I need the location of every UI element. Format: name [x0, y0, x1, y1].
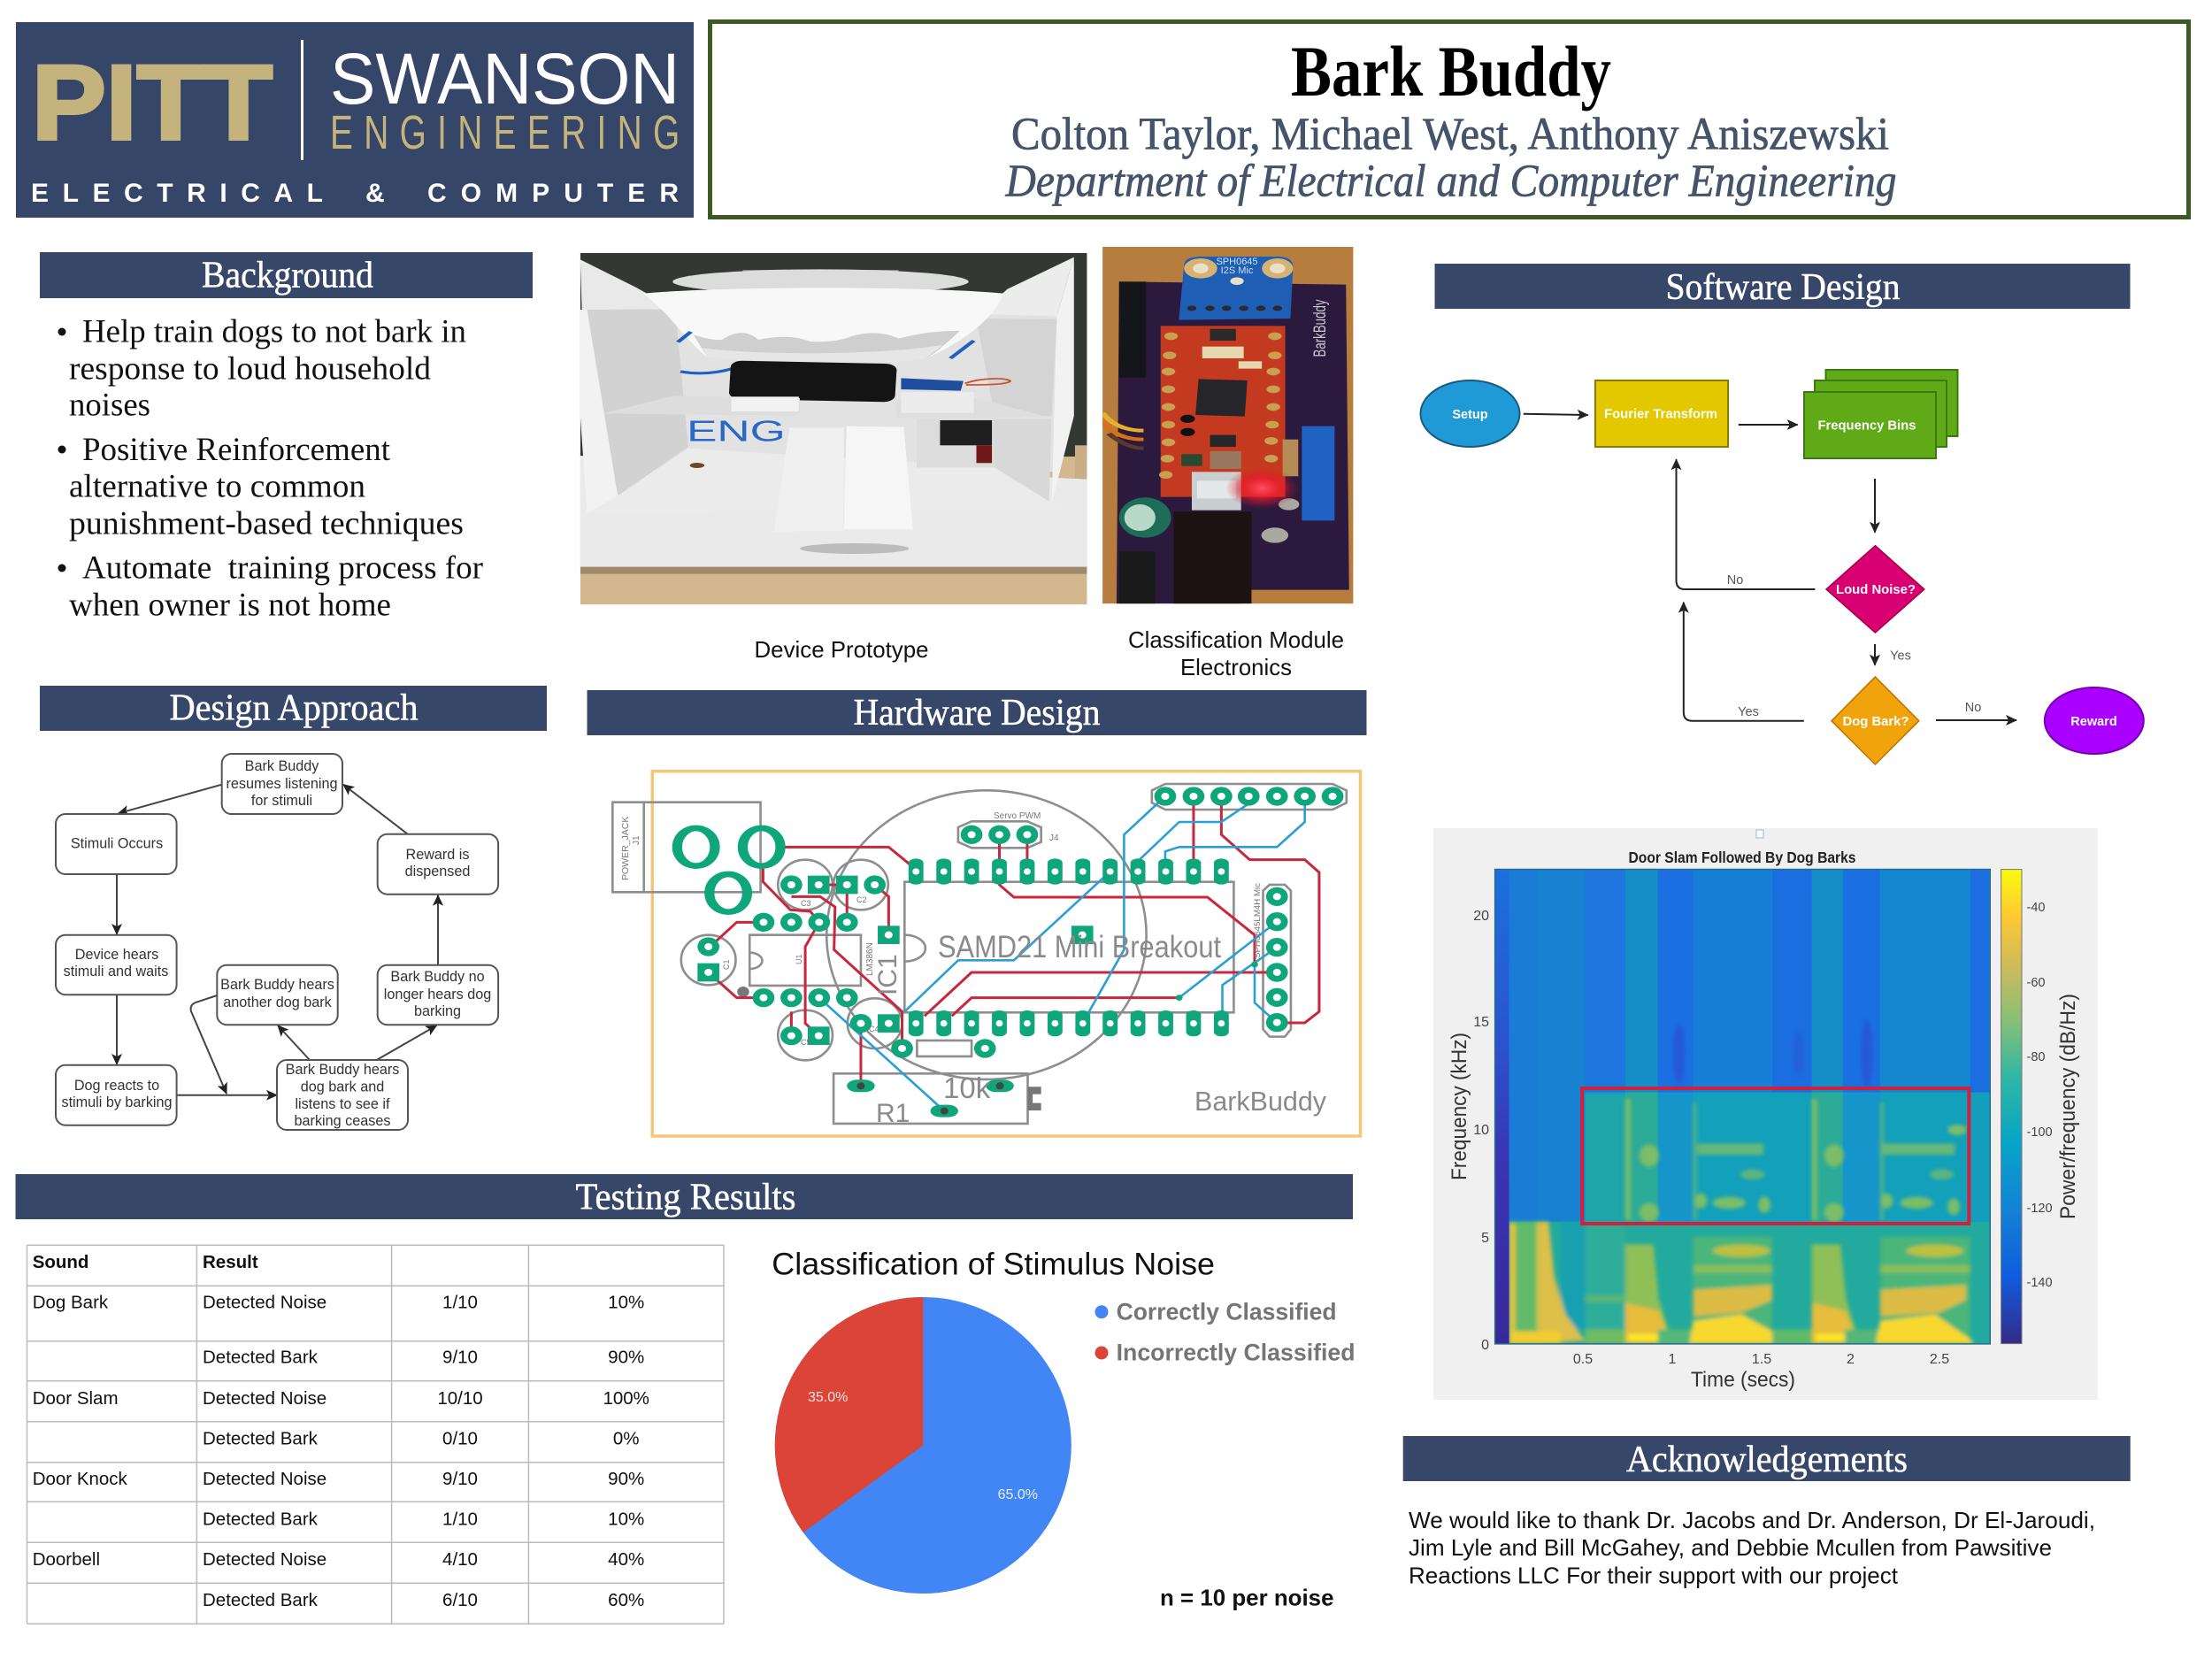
- PCB labels: IC1: [873, 954, 902, 995]
- box: resumes listening: [222, 754, 342, 814]
- pie chart: [775, 1297, 1071, 1594]
- heading: software design: Software Design: [1665, 267, 1901, 308]
- results table: 10%: [608, 1509, 644, 1530]
- caption: classification module electronics: Classification Module: [1128, 626, 1344, 653]
- panel: testing results: [16, 1174, 1356, 1624]
- photo: classification module electronics: SPH0645: [1216, 257, 1258, 267]
- node: reward: [2045, 687, 2144, 754]
- PCB labels: [620, 811, 1326, 1128]
- PCB labels: LM386N: [865, 942, 875, 976]
- results table: 6/10: [442, 1590, 478, 1610]
- pie chart: 65.0%: [998, 1487, 1038, 1502]
- heading: software design: [1435, 264, 2131, 309]
- chart legend: Incorrectly Classified: [1117, 1339, 1356, 1365]
- box: dog reacts: stimuli by barking: [61, 1094, 173, 1110]
- box: hears another bark: Bark Buddy hears: [220, 977, 334, 993]
- edge labels: Yes: [1738, 705, 1759, 719]
- x axis: 1: [1669, 1352, 1677, 1367]
- chart title: Classification of Stimulus Noise: [772, 1248, 1215, 1282]
- PCB layout diagram: [612, 772, 1361, 1136]
- box: resumes listening: for stimuli: [251, 793, 312, 809]
- photo: device prototype: [580, 253, 1091, 604]
- panel: hardware design: [588, 690, 1366, 1136]
- y axis: 15: [1473, 1015, 1489, 1030]
- PCB labels: C4: [869, 1025, 879, 1033]
- results table: Detected Bark: [203, 1429, 319, 1449]
- panel: software design: [1421, 264, 2144, 764]
- results table: 100%: [603, 1388, 649, 1409]
- chart legend: [1095, 1299, 1356, 1365]
- results table: 9/10: [442, 1469, 478, 1489]
- node: fourier transform: [1595, 380, 1728, 447]
- results table: 40%: [608, 1549, 644, 1570]
- y axis: 20: [1473, 909, 1489, 924]
- x axis: [1573, 1352, 1949, 1392]
- department: Department of Electrical and Computer Engineering: [1005, 156, 1897, 207]
- acknowledgements text: Jim Lyle and Bill McGahey, and Debbie Mcullen from Pawsitive: [1409, 1534, 2052, 1561]
- box: hears dog bark: Bark Buddy hears: [286, 1062, 399, 1078]
- PCB labels: C2: [856, 895, 867, 904]
- spectrogram title: Door Slam Followed By Dog Barks: [1628, 849, 1856, 866]
- title block: [710, 21, 2189, 218]
- box: hears another bark: [217, 965, 338, 1025]
- PCB labels: J4: [1049, 833, 1059, 843]
- results table: Sound: [33, 1252, 88, 1272]
- box: stimuli occurs: [56, 814, 177, 874]
- node: setup: Setup: [1452, 408, 1488, 422]
- acknowledgements text: Reactions LLC For their support with our project: [1409, 1563, 1899, 1589]
- PCB labels: SAMD21 Mini Breakout: [938, 930, 1221, 964]
- results table: 60%: [608, 1590, 644, 1610]
- results table: 1/10: [442, 1293, 478, 1313]
- photo: classification module electronics: I2S Mic: [1221, 265, 1254, 276]
- results table: 9/10: [442, 1348, 478, 1368]
- red highlight rectangle: [1582, 1088, 1969, 1224]
- PCB labels: C1: [722, 959, 731, 970]
- y axis: Frequency (kHz): [1448, 1033, 1471, 1180]
- logo: Pitt Swanson Engineering: ELECTRICAL: [31, 179, 323, 208]
- box: hears another bark: another dog bark: [223, 995, 333, 1010]
- x axis: Time (secs): [1691, 1368, 1795, 1392]
- box: dog reacts: [56, 1065, 177, 1125]
- colorbar labels: Power/frequency (dB/Hz): [2056, 994, 2080, 1219]
- background bullet list: noises: [69, 388, 150, 423]
- acknowledgements text: [1409, 1507, 2095, 1589]
- PCB labels: Servo PWM: [994, 811, 1041, 821]
- edge labels: [1727, 573, 1981, 719]
- box: reward dispensed: [378, 834, 498, 895]
- edge labels: No: [1727, 573, 1743, 588]
- colorbar labels: -140: [2026, 1276, 2053, 1290]
- heading: background: [40, 252, 533, 298]
- photo: classification module electronics: [1102, 247, 1353, 603]
- box: reward dispensed: Reward is: [406, 847, 469, 863]
- PCB labels: C5: [801, 1038, 811, 1047]
- power jack rings: [677, 828, 780, 912]
- logo: Pitt Swanson Engineering: SWANSON: [330, 39, 680, 119]
- results table: [27, 1245, 724, 1624]
- panel: background: [40, 252, 533, 623]
- results table: Door Knock: [33, 1469, 128, 1489]
- y axis: [1448, 909, 1489, 1353]
- box: stimuli occurs: Stimuli Occurs: [71, 835, 163, 851]
- heading: hardware design: Hardware Design: [853, 693, 1101, 733]
- heading: background: Background: [202, 255, 373, 296]
- heading: hardware design: [588, 690, 1366, 735]
- y axis: 10: [1473, 1123, 1489, 1138]
- edge labels: No: [1965, 701, 1981, 715]
- results table: Doorbell: [33, 1549, 100, 1570]
- box: no longer hears: longer hears dog: [384, 987, 491, 1002]
- box: hears dog bark: [277, 1060, 408, 1130]
- results table: Door Slam: [33, 1388, 119, 1409]
- box: no longer hears: Bark Buddy no: [390, 969, 485, 985]
- heading: acknowledgements: [1403, 1436, 2131, 1481]
- chart legend: Correctly Classified: [1117, 1299, 1337, 1325]
- results table: 10/10: [437, 1388, 483, 1409]
- blue traces: [819, 796, 1305, 1111]
- box: resumes listening: Bark Buddy: [245, 758, 319, 774]
- PCB labels: R1: [876, 1099, 910, 1128]
- y axis: 0: [1481, 1338, 1489, 1353]
- node: dog bark decision: [1832, 677, 1919, 764]
- results table: Detected Noise: [203, 1469, 326, 1489]
- photo: device prototype: ENG: [687, 415, 786, 448]
- background bullet list: Help train dogs to not bark in: [82, 313, 466, 350]
- node: frequency bins: [1804, 370, 1957, 458]
- logo: Pitt Swanson Engineering: &: [365, 179, 385, 208]
- results table: Detected Bark: [203, 1590, 319, 1610]
- x axis: 1.5: [1752, 1352, 1771, 1367]
- panel: design approach: [40, 686, 547, 1130]
- results table: 90%: [608, 1469, 644, 1489]
- results table: Detected Noise: [203, 1388, 326, 1409]
- heading: design approach: Design Approach: [170, 688, 418, 729]
- results table: Detected Bark: [203, 1348, 319, 1368]
- colorbar labels: -100: [2026, 1125, 2053, 1140]
- caption: classification module electronics: [1128, 626, 1344, 680]
- logo: Pitt Swanson Engineering: [16, 22, 694, 218]
- background bullet list: alternative to common: [69, 469, 365, 504]
- box: hears dog bark: dog bark and: [301, 1079, 384, 1095]
- node: dog bark decision: Dog Bark?: [1842, 715, 1909, 729]
- box: resumes listening: resumes listening: [227, 776, 337, 792]
- photo: classification module electronics: BarkBuddy: [1311, 299, 1330, 357]
- node: loud noise decision: [1826, 546, 1924, 633]
- x axis: 0.5: [1573, 1352, 1593, 1367]
- heading: testing results: [16, 1174, 1353, 1219]
- results table: 90%: [608, 1348, 644, 1368]
- box: hears dog bark: listens to see if: [295, 1096, 390, 1112]
- node: fourier transform: Fourier Transform: [1604, 408, 1717, 422]
- edge labels: Yes: [1890, 649, 1911, 664]
- node: setup: [1421, 380, 1520, 447]
- box: dog reacts: Dog reacts to: [74, 1078, 159, 1094]
- colorbar labels: [2026, 901, 2080, 1290]
- background bullet list: Automate training process for: [82, 550, 483, 586]
- PCB labels: BarkBuddy: [1194, 1086, 1326, 1117]
- results table: 4/10: [442, 1549, 478, 1570]
- results table: 0/10: [442, 1429, 478, 1449]
- pie chart: 35.0%: [808, 1390, 848, 1405]
- sample size note: n = 10 per noise: [1160, 1584, 1334, 1610]
- box: device hears: stimuli and waits: [64, 964, 168, 979]
- authors: Colton Taylor, Michael West, Anthony Aniszewski: [1011, 110, 1889, 159]
- x axis: 2.5: [1930, 1352, 1949, 1367]
- results table: Detected Bark: [203, 1509, 319, 1530]
- results table: 10%: [608, 1293, 644, 1313]
- spectrogram plot: [1495, 870, 1990, 1344]
- node: loud noise decision: Loud Noise?: [1836, 583, 1916, 597]
- box: no longer hears: [378, 965, 498, 1025]
- colorbar labels: -60: [2026, 976, 2045, 990]
- box: device hears: [56, 935, 177, 995]
- results table: Dog Bark: [33, 1293, 109, 1313]
- caption: device prototype: Device Prototype: [754, 636, 929, 663]
- background bullet list: Positive Reinforcement: [82, 432, 391, 468]
- flowchart: software: [1421, 370, 2144, 764]
- flowchart: training cycle: [56, 754, 498, 1130]
- node: frequency bins: Frequency Bins: [1817, 419, 1916, 434]
- logo: Pitt Swanson Engineering: PITT: [32, 43, 273, 162]
- box: device hears: Device hears: [75, 947, 158, 963]
- colorbar labels: -80: [2026, 1050, 2045, 1064]
- colorbar labels: -40: [2026, 901, 2045, 915]
- node: reward: Reward: [2070, 715, 2117, 729]
- poster title: Bark Buddy: [1291, 31, 1611, 111]
- background bullet list: [58, 313, 483, 623]
- heading: design approach: [40, 686, 547, 731]
- heading: testing results: Testing Results: [575, 1177, 796, 1217]
- box: no longer hears: barking: [414, 1003, 461, 1019]
- colorbar labels: -120: [2026, 1202, 2053, 1216]
- x axis: 2: [1847, 1352, 1855, 1367]
- results table: 0%: [613, 1429, 640, 1449]
- PCB labels: POWER_JACK: [620, 817, 631, 880]
- caption: classification module electronics: Electronics: [1180, 654, 1292, 680]
- PCB labels: J1: [632, 835, 641, 845]
- PCB labels: 10k: [943, 1071, 991, 1104]
- y axis: 5: [1481, 1231, 1489, 1246]
- background bullet list: when owner is not home: [69, 588, 391, 623]
- red traces: [709, 796, 1319, 1086]
- box: reward dispensed: dispensed: [405, 864, 470, 879]
- PCB labels: C3: [801, 899, 811, 908]
- colorbar: [2001, 870, 2022, 1344]
- results table: Result: [203, 1252, 258, 1272]
- results table: Detected Noise: [203, 1549, 326, 1570]
- heading: acknowledgements: Acknowledgements: [1626, 1440, 1908, 1480]
- software arrows: [1524, 414, 2016, 721]
- PCB labels: SPH0645LM4H Mic: [1253, 883, 1263, 958]
- panel: acknowledgements: [1403, 1436, 2131, 1589]
- results table: 1/10: [442, 1509, 478, 1530]
- flow arrows: [117, 785, 438, 1095]
- logo: Pitt Swanson Engineering: COMPUTER: [427, 179, 679, 208]
- chart: spectrogram: [1433, 828, 2098, 1400]
- PCB labels: U1: [795, 954, 803, 964]
- results table: Detected Noise: [203, 1293, 326, 1313]
- background bullet list: punishment-based techniques: [69, 506, 464, 541]
- box: hears dog bark: barking ceases: [295, 1113, 390, 1129]
- header pads: [697, 787, 1343, 1118]
- acknowledgements text: We would like to thank Dr. Jacobs and Dr. Anderson, Dr El-Jaroudi,: [1409, 1507, 2095, 1533]
- logo: Pitt Swanson Engineering: ENGINEERING: [330, 105, 680, 158]
- background bullet list: response to loud household: [69, 350, 432, 388]
